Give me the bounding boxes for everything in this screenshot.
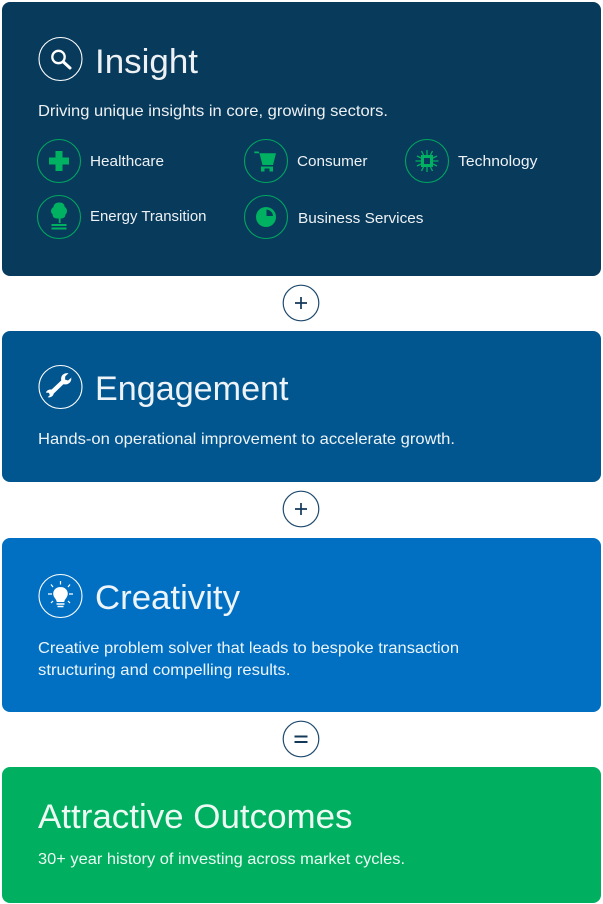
sector: Technology: Technology	[458, 153, 538, 170]
sector: Consumer: Consumer	[297, 153, 368, 170]
operator: equals	[283, 721, 319, 757]
text: Creativity description: Creative problem solver that leads to bespoke transaction	[38, 640, 459, 657]
sector: Business Services	[244, 196, 424, 238]
heading: Creativity: Creativity	[95, 579, 240, 617]
text: Creativity description	[38, 640, 459, 679]
operator: plus	[283, 285, 319, 321]
text: Creativity description: structuring and compelling results.	[38, 662, 290, 679]
text: Insight description: Driving unique insights in core, growing sectors.	[38, 103, 388, 120]
heading: Attractive Outcomes: Attractive Outcomes	[38, 798, 352, 836]
icon: wrench	[39, 366, 82, 408]
sector: Healthcare	[38, 140, 164, 182]
heading: Engagement: Engagement	[95, 370, 289, 408]
sector: Consumer	[244, 140, 368, 182]
sector: Business Services: Business Services	[298, 210, 424, 227]
text: Outcomes description: 30+ year history of investing across market cycles.	[38, 851, 405, 868]
heading: Insight: Insight	[95, 43, 199, 81]
panel: Attractive Outcomes	[2, 767, 601, 903]
panel: Insight	[2, 2, 601, 276]
icon: magnifying glass	[39, 38, 82, 80]
operator: plus	[283, 491, 319, 527]
sector: Energy Transition: Energy Transition	[90, 208, 206, 225]
panel: Creativity	[2, 538, 601, 712]
icon: light bulb	[39, 574, 82, 618]
sector: Technology	[406, 140, 538, 182]
sector: Healthcare: Healthcare	[90, 153, 164, 170]
sector: Energy Transition	[38, 196, 206, 238]
text: Engagement description: Hands-on operational improvement to accelerate growth.	[38, 431, 455, 448]
panel: Engagement	[2, 331, 601, 482]
